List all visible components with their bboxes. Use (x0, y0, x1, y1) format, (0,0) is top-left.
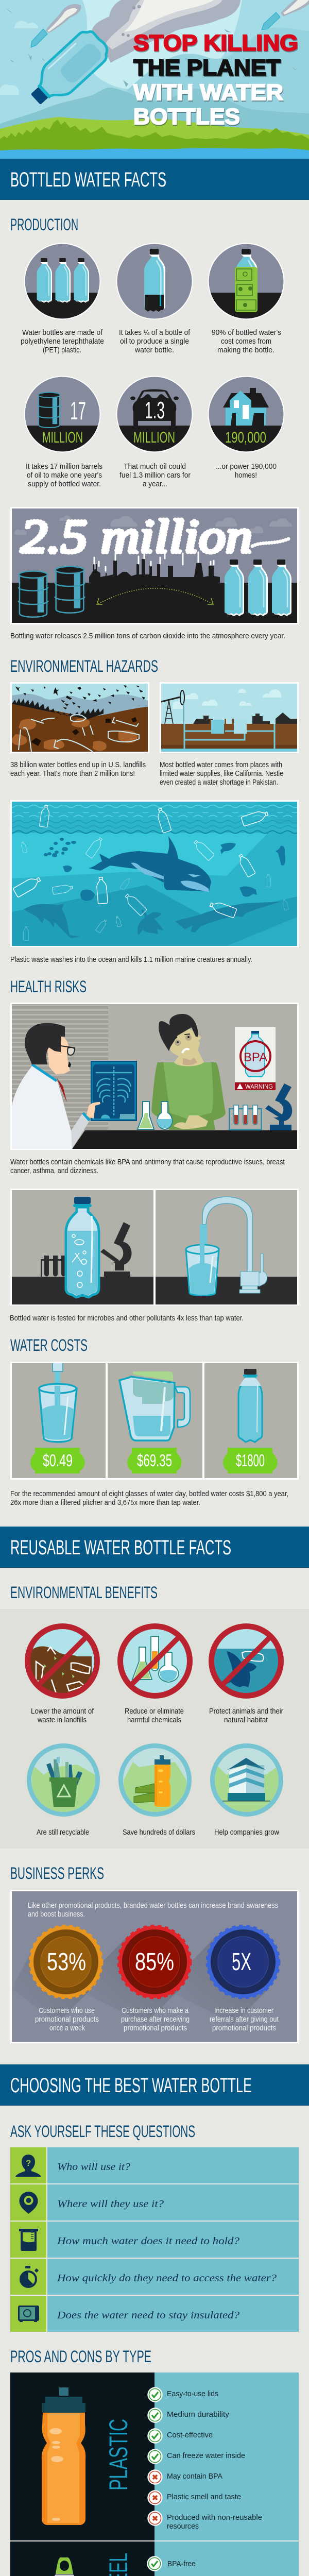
fact: PET plastic: (PET) plastic. (43, 346, 81, 354)
caption: chemicals (10, 1158, 285, 1175)
fact: 1.3 million cars: a year... (143, 480, 167, 488)
pitcher (119, 1371, 190, 1440)
question: who: Who will use it? (57, 2161, 130, 2173)
small fish and creatures (44, 838, 285, 901)
panel: stainless steel (10, 2541, 299, 2576)
orca (89, 836, 211, 892)
stat captions: Increase in customer (214, 2007, 273, 2015)
section band: choosing the best water bottle (0, 2064, 309, 2106)
price tags (30, 1448, 278, 1473)
fact: PET plastic (21, 243, 104, 354)
faucet and glass (186, 1197, 267, 1295)
question: where: Where will they use it? (57, 2198, 164, 2210)
caption: chemicals: cancer, asthma, and dizziness. (10, 1167, 98, 1175)
fact: 190,000 homes (208, 376, 284, 480)
icon: companies grow (212, 1745, 281, 1815)
stat: 53% (30, 1926, 102, 1998)
panel: plastic (10, 2372, 299, 2540)
title: WITH WATER (133, 80, 283, 105)
x-ray (91, 1061, 136, 1121)
fact: PET plastic: polyethylene terephthalate (21, 337, 104, 346)
caption: water supplies: Most bottled water comes from places with (160, 761, 282, 769)
fact: cost of the bottle: 90% of bottled water's (212, 329, 281, 337)
pros and cons list: Can freeze water inside (167, 2452, 245, 2460)
question: how much (10, 2222, 299, 2258)
caption: marine creatures: Plastic waste washes into the ocean and kills 1.1 million marine creatures annually. (10, 956, 252, 964)
icon: no landfills (27, 1626, 97, 1696)
icon: no chemicals (120, 1626, 190, 1696)
microscope (265, 1083, 292, 1130)
captions row two: Save hundreds of dollars (123, 1828, 195, 1837)
caption: landfills: each year. That's more than 2 million tons! (10, 770, 135, 778)
panel: environmental benefits (0, 1609, 309, 1849)
warning poster: BPA (244, 1050, 267, 1064)
test tubes (230, 1105, 262, 1130)
stat: 85%: 85% (135, 1948, 174, 1976)
fact: 17 million barrels: supply of bottled water. (28, 480, 101, 488)
heading: business perks: BUSINESS PERKS (10, 1864, 104, 1883)
header illustration (0, 0, 309, 159)
intro text: Like other promotional products, branded water bottles can increase brand awareness (28, 1902, 278, 1910)
icon: save money (121, 1745, 190, 1815)
fact: quarter bottle of oil: oil to produce a single (120, 337, 189, 346)
buildings (193, 713, 297, 724)
fact: quarter bottle of oil: water bottle. (134, 346, 174, 354)
bottles in the water (13, 805, 289, 940)
caption: landfills: 38 billion water bottles end up in U.S. landfills (10, 761, 146, 769)
oil pump (161, 690, 184, 724)
caption: water supplies: limited water supplies, like California. Nestle (160, 770, 283, 778)
captions row one: waste in landfills (37, 1716, 87, 1724)
fact: 17 million barrels: It takes 17 million barrels (26, 463, 102, 471)
patient (151, 1014, 226, 1130)
question: where (10, 2184, 299, 2221)
tap glass (39, 1363, 77, 1442)
stat captions (35, 2007, 279, 2032)
dotted arrow (97, 588, 213, 604)
intro text (28, 1902, 278, 1919)
caption: water supplies: even created a water shortage in Pakistan. (160, 778, 278, 787)
fact: PET plastic: Water bottles are made of (22, 329, 103, 337)
stat captions: Customers who make a (122, 2007, 189, 2015)
caption: testing: Bottled water is tested for microbes and other pollutants 4x less than tap water. (10, 1314, 244, 1323)
fact: cost of the bottle: cost comes from (221, 337, 271, 346)
pros and cons list: Medium durability (167, 2411, 230, 2419)
question: how quickly (10, 2259, 299, 2295)
bottle (238, 1369, 262, 1442)
fact: cost of the bottle: making the bottle. (217, 346, 274, 354)
stat captions: promotional products (212, 2024, 276, 2032)
section band: bottled water facts (0, 159, 309, 200)
heading: environmental hazards: ENVIRONMENTAL HAZARDS (10, 657, 158, 675)
fact: 190,000 homes: homes! (235, 471, 257, 480)
panel: water costs (10, 1362, 299, 1480)
panel: landfill (10, 682, 149, 753)
smoke cloud (92, 0, 241, 63)
fact: 190,000 homes: ...or power 190,000 (216, 463, 277, 471)
stat captions: promotional products (35, 2015, 99, 2024)
fact: 190,000 homes: 190,000 (225, 429, 266, 446)
captions row one: Lower the amount of (31, 1707, 94, 1716)
caption: costs (10, 1490, 288, 1507)
doctor (12, 1023, 100, 1149)
pros and cons list: BPA-free (167, 2560, 196, 2568)
panel: doctor and patient (10, 1003, 299, 1150)
question: who: ? (26, 2158, 31, 2168)
fact: 17 million barrels (24, 376, 102, 488)
pros and cons list: resources (167, 2522, 199, 2531)
plastic bottle (42, 2387, 85, 2525)
icon: no harm to animals (211, 1626, 281, 1700)
title (133, 31, 298, 129)
stat captions: purchase after receiving (121, 2015, 190, 2024)
bottles (225, 560, 291, 616)
question: how much: How much water does it need to hold? (57, 2235, 239, 2247)
question: insulated: Does the water need to stay insulated? (57, 2310, 239, 2321)
big plastic bottle (23, 26, 113, 113)
stat captions: once a week (49, 2024, 85, 2032)
fact: 17 million barrels: MILLION (42, 429, 83, 446)
contaminated bottle (66, 1197, 99, 1297)
price tags: $0.49 (43, 1451, 73, 1470)
long shadows (12, 1936, 269, 2024)
heading: production: PRODUCTION (10, 215, 78, 234)
lab flasks (138, 1101, 172, 1129)
captions row one: harmful chemicals (127, 1716, 181, 1724)
question: insulated (10, 2296, 299, 2332)
fact: cost of the bottle (208, 243, 284, 354)
heading: environmental benefits: ENVIRONMENTAL BENEFITS (10, 1583, 158, 1602)
question: how quickly: How quickly do they need to access the water? (57, 2273, 277, 2284)
barrels (19, 567, 84, 617)
stat captions: promotional products (124, 2024, 187, 2032)
fact: 1.3 million cars: 1.3 (145, 397, 165, 423)
fact: 1.3 million cars: That much oil could (124, 463, 186, 471)
heading: health risks: HEALTH RISKS (10, 977, 87, 996)
captions row one: Protect animals and their (209, 1707, 283, 1716)
panel: business perks (10, 1890, 299, 2043)
pipes (184, 724, 274, 751)
smoke lettering: 2.5 million (21, 510, 252, 563)
stat: 5X (207, 1926, 279, 1998)
fact: 17 million barrels: 17 (70, 397, 86, 425)
heading: ask yourself these questions: ASK YOURSELF THESE QUESTIONS (10, 2122, 195, 2141)
section band: reusable water bottle facts (0, 1527, 309, 1568)
stat: 85% (118, 1926, 191, 1998)
caption: costs: 26x more than a filtered pitcher and 3,675x more than tap water. (10, 1499, 200, 1507)
pros and cons list: Cost-effective (167, 2431, 213, 2439)
small bottle right (262, 0, 309, 30)
question: who (10, 2147, 299, 2183)
pros and cons list: May contain BPA (167, 2472, 222, 2481)
panel: 2.5 million tons of CO2 (10, 507, 299, 624)
title: STOP KILLING (133, 31, 298, 56)
small bottle left (31, 4, 81, 47)
caption: water supplies (160, 761, 283, 787)
pros and cons list (147, 2556, 238, 2576)
fact: 1.3 million cars: MILLION (133, 429, 175, 446)
caption: landfills (10, 761, 146, 778)
pros and cons list (147, 2387, 262, 2531)
fact: quarter bottle of oil (116, 243, 193, 354)
warning poster: WARNING (245, 1084, 273, 1090)
stat: 5X: 5X (232, 1948, 251, 1976)
panel: water extraction (160, 682, 299, 753)
price tags: $69.35 (137, 1451, 172, 1470)
pros and cons list: Produced with non-reusable (167, 2514, 262, 2522)
title: BOTTLES (133, 105, 240, 129)
stat: 53%: 53% (47, 1948, 86, 1976)
captions row one: natural habitat (224, 1716, 268, 1724)
fact: 1.3 million cars (116, 376, 193, 488)
birds (6, 8, 300, 87)
stat captions: Customers who use (39, 2007, 95, 2015)
captions row two: Are still recyclable (37, 1828, 89, 1837)
fact: 17 million barrels: of oil to make one year's (27, 471, 102, 480)
price tags: $1800 (236, 1451, 265, 1470)
fact: 1.3 million cars: fuel 1.3 million cars for (119, 471, 191, 480)
pros and cons list: Easy-to-use lids (167, 2390, 218, 2398)
captions row one (31, 1707, 283, 1724)
steel bottle (45, 2557, 84, 2576)
factory (89, 546, 220, 583)
panel: ocean (10, 800, 299, 947)
captions row two (37, 1828, 279, 1837)
section band: bottled water facts: BOTTLED WATER FACTS (10, 168, 166, 191)
stat captions: referrals after giving out (210, 2015, 279, 2024)
caption: carbon dioxide: Bottling water releases 2.5 million tons of carbon dioxide into the atmosphere every year. (10, 632, 285, 640)
icon: recyclable (29, 1745, 98, 1815)
intro text: and boost business. (28, 1910, 85, 1919)
warning poster (235, 1027, 276, 1090)
captions row two: Help companies grow (214, 1828, 279, 1837)
title: THE PLANET (133, 56, 281, 80)
captions row one: Reduce or eliminate (125, 1707, 184, 1716)
marine animals (24, 902, 281, 938)
heading: water costs: WATER COSTS (10, 1336, 88, 1354)
clouds (15, 516, 292, 535)
fact: quarter bottle of oil: It takes ¼ of a bottle of (119, 329, 191, 337)
pros and cons list: Plastic smell and taste (167, 2493, 241, 2501)
heading: pros and cons by type: PROS AND CONS BY TYPE (10, 2347, 151, 2366)
panel: bottled vs tap testing (10, 1189, 299, 1306)
label: plastic: PLASTIC (104, 2419, 133, 2490)
microscope and tubes (41, 1222, 132, 1277)
